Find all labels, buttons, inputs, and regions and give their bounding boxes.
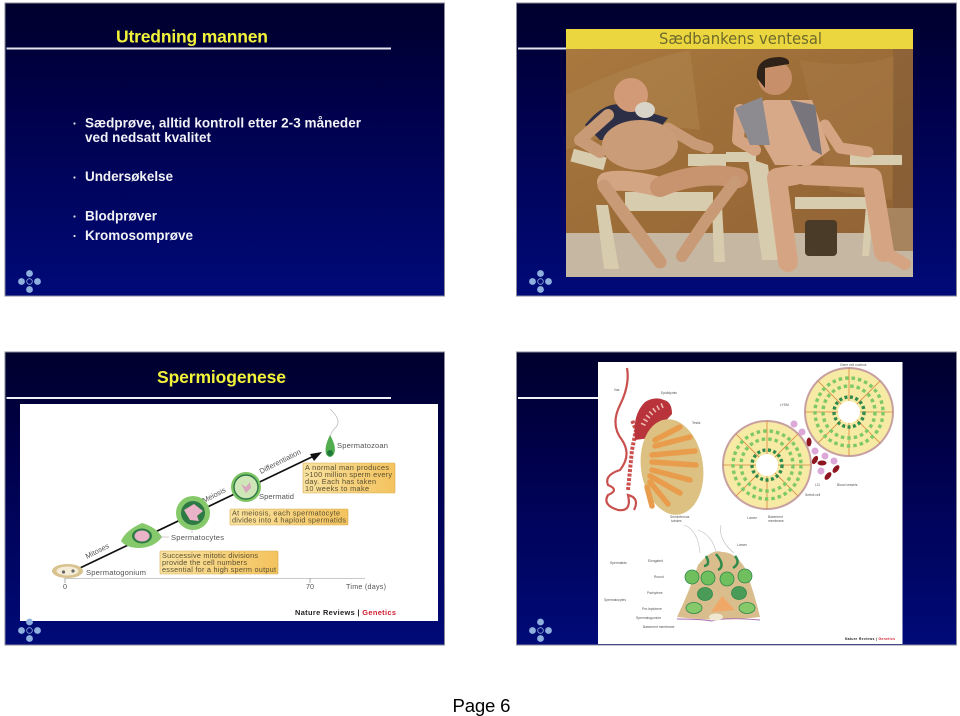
slide 1 bullet list: Kromosomprøve bbox=[85, 228, 193, 243]
slide 1 bullet list: Sædprøve, alltid kontroll etter 2-3 måneder bbox=[85, 116, 362, 130]
time axis: 70 bbox=[306, 582, 314, 591]
panel b: seminiferous tubule cross-sections: Sertoli cell bbox=[805, 493, 820, 497]
cell: spermatid bbox=[231, 472, 261, 502]
cell labels: Spermatogonium bbox=[86, 568, 146, 577]
panel a: testis and epididymis: Testis bbox=[692, 421, 701, 425]
slide 4: testis anatomy bbox=[516, 352, 956, 645]
slide 1 bullet list: Blodprøver bbox=[85, 208, 158, 224]
credit: Nature Reviews Genetics: Nature Reviews | Genetics bbox=[845, 637, 895, 641]
slide 1 title underline bbox=[6, 48, 391, 50]
panel c: seminiferous epithelium: Pre-leptotene bbox=[642, 607, 662, 611]
cell: spermatocyte bbox=[121, 523, 162, 548]
callout: sperm production: 10 weeks to make bbox=[305, 484, 369, 493]
panel a: testis and epididymis bbox=[606, 368, 709, 523]
cell labels: Spermatocytes bbox=[171, 533, 224, 542]
slide 2 yellow title banner bbox=[566, 29, 913, 49]
panel c: seminiferous epithelium: Spermatids bbox=[610, 561, 627, 565]
callout: mitotic divisions: essential for a high sperm output bbox=[162, 565, 276, 574]
panel b: seminiferous tubule cross-sections: Lumen bbox=[747, 516, 757, 520]
panel a: testis and epididymis: Vas bbox=[614, 388, 620, 392]
second man, seated bbox=[738, 110, 905, 264]
chairs bbox=[571, 149, 902, 269]
panel b: seminiferous tubule cross-sections: Germ cell nucleus bbox=[840, 363, 867, 367]
slide 2 photo: two men seated on garden chairs, simplified shapes bbox=[566, 49, 913, 277]
panel c: seminiferous epithelium bbox=[604, 525, 760, 629]
panel c: seminiferous epithelium: Spermatogonium bbox=[636, 616, 661, 620]
boots bbox=[805, 220, 837, 256]
slide 1 bullet list bbox=[73, 116, 362, 243]
panel a: testis and epididymis: Seminiferous bbox=[670, 515, 690, 519]
cell labels: Spermatozoan bbox=[337, 441, 388, 450]
icon: slide 4 logo bbox=[529, 619, 552, 642]
credit: Nature Reviews Genetics: Nature Reviews | Genetics bbox=[295, 608, 396, 617]
spermatogenesis timeline diagram bbox=[20, 404, 438, 621]
callout: meiosis: divides into 4 haploid spermatids bbox=[232, 516, 346, 524]
stage labels on arrow: Differentiation bbox=[258, 447, 302, 476]
panel c: seminiferous epithelium: Lumen bbox=[737, 543, 747, 547]
panel c: seminiferous epithelium: Pachytene bbox=[647, 591, 663, 595]
cell labels bbox=[86, 441, 388, 577]
slide 1 bullet list: ved nedsatt kvalitet bbox=[85, 130, 212, 145]
panel b: seminiferous tubule cross-sections: membrane bbox=[768, 519, 784, 523]
dark jacket behind first man bbox=[585, 104, 668, 140]
slide 1: Utredning mannen bbox=[5, 3, 444, 296]
panel c: seminiferous epithelium: Spermatocytes bbox=[604, 598, 626, 602]
slide 4 title underline bbox=[518, 397, 598, 399]
slide 2: Sædbankens ventesal bbox=[516, 3, 956, 296]
panel c: seminiferous epithelium: Elongated bbox=[648, 559, 663, 563]
callout: mitotic divisions bbox=[160, 551, 278, 574]
panel c: seminiferous epithelium: Basement membrane bbox=[643, 625, 675, 629]
cell labels: Spermatid bbox=[259, 492, 294, 501]
first man, seated bbox=[580, 115, 738, 262]
callout: meiosis: At meiosis, each spermatocyte bbox=[232, 508, 340, 518]
stage labels on arrow: Mitoses bbox=[84, 541, 111, 561]
callout: meiosis bbox=[230, 508, 348, 525]
icon: slide 2 logo bbox=[529, 270, 552, 293]
callout: sperm production: >100 million sperm every bbox=[305, 470, 392, 479]
time axis: Time (days) bbox=[346, 582, 386, 591]
stage labels on arrow: Meiosis bbox=[201, 485, 228, 505]
icon: slide 3 logo bbox=[18, 619, 41, 642]
panel b: seminiferous tubule cross-sections: Basement bbox=[768, 515, 783, 519]
panel b: seminiferous tubule cross-sections bbox=[723, 363, 893, 523]
time axis bbox=[63, 578, 386, 591]
panel b: seminiferous tubule cross-sections: LCI bbox=[815, 483, 820, 487]
slide 3 title underline bbox=[6, 397, 391, 399]
callout: sperm production: day. Each has taken bbox=[305, 477, 376, 486]
slide 2 title underline bbox=[518, 48, 566, 50]
panel a: testis and epididymis: Epididymis bbox=[661, 391, 677, 395]
panel a: testis and epididymis: tubules bbox=[671, 519, 682, 523]
slide 1 bullet list: Undersøkelse bbox=[85, 169, 173, 184]
page number: Page 6 bbox=[452, 695, 510, 716]
stage labels on arrow bbox=[84, 447, 302, 561]
panel b: seminiferous tubule cross-sections: Blood vessels bbox=[837, 483, 858, 487]
cell: spermatogonium bbox=[52, 564, 83, 578]
slide 3: Spermiogenese bbox=[5, 352, 444, 645]
slide 2 yellow title banner: Sædbankens ventesal bbox=[659, 29, 822, 48]
callout: mitotic divisions: provide the cell numbers bbox=[162, 558, 247, 567]
panel b: seminiferous tubule cross-sections: LYSM bbox=[780, 403, 789, 407]
callout: sperm production: A normal man produces bbox=[305, 463, 389, 472]
progress arrow bbox=[80, 452, 322, 568]
callout: sperm production bbox=[303, 463, 395, 493]
callout: mitotic divisions: Successive mitotic divisions bbox=[162, 551, 258, 560]
cell: dividing spermatocyte bbox=[176, 496, 210, 530]
time axis: 0 bbox=[63, 582, 67, 591]
slide 3 title: Spermiogenese bbox=[157, 367, 286, 387]
panel c: seminiferous epithelium: Round bbox=[654, 575, 664, 579]
slide 1 title: Utredning mannen bbox=[116, 26, 268, 46]
icon: slide 1 logo bbox=[18, 270, 41, 293]
cell: spermatozoan bbox=[326, 409, 338, 457]
testis anatomy figure bbox=[598, 362, 902, 644]
